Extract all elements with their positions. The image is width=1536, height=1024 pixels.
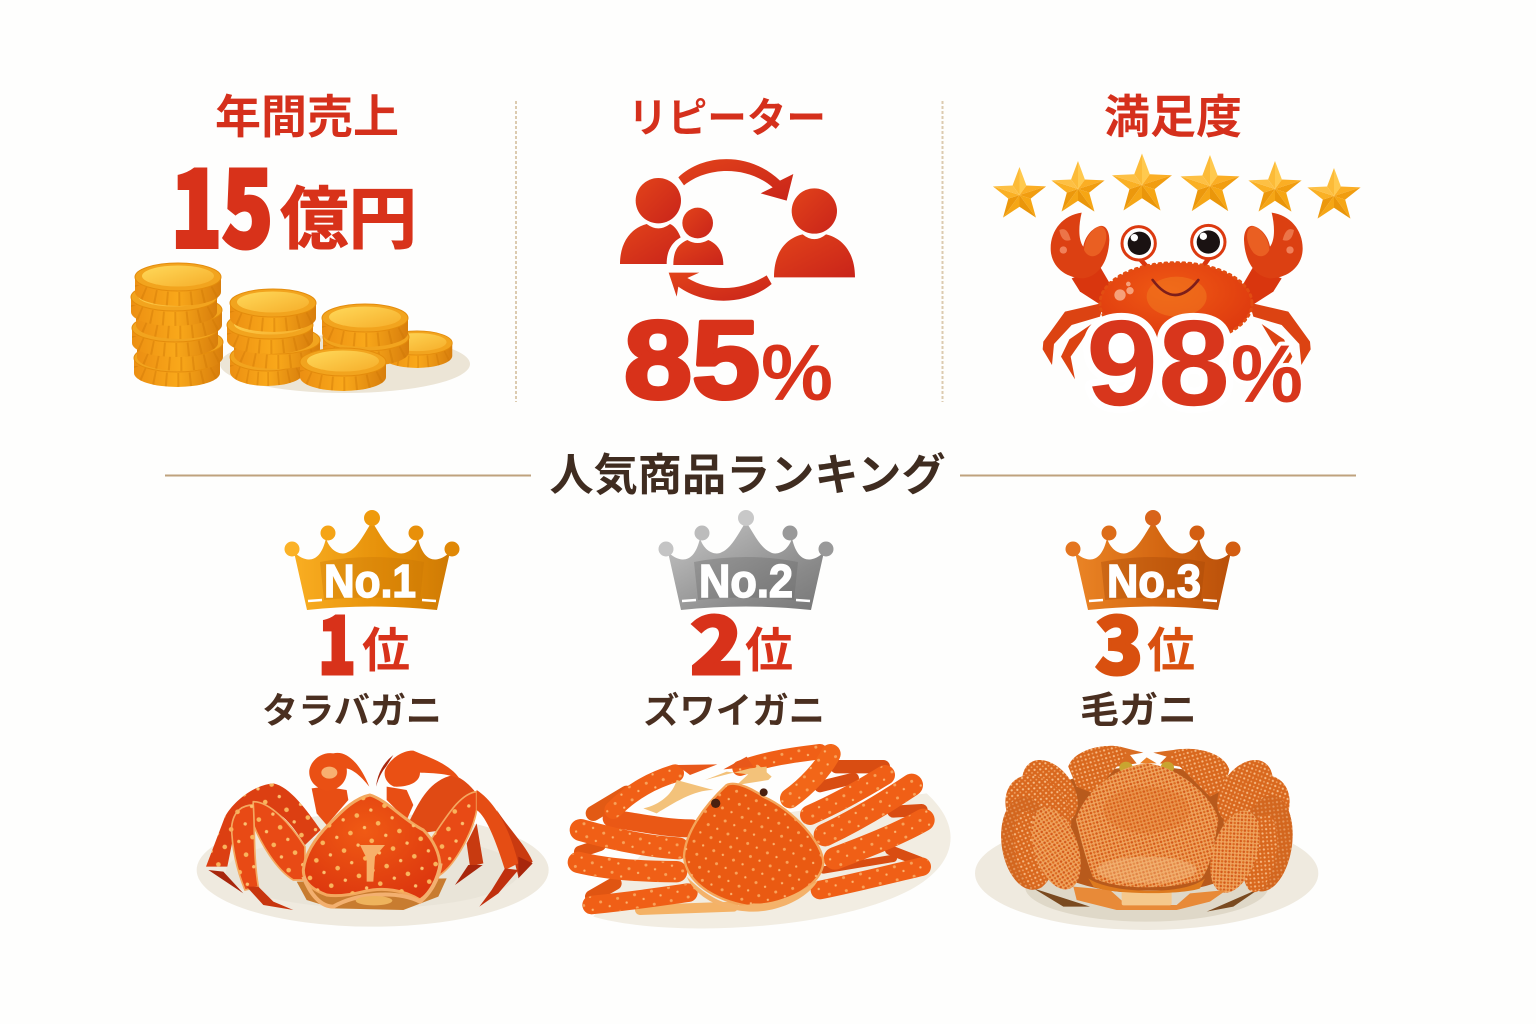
icon: bronze crown No.3: No.3 <box>1107 555 1201 607</box>
rank label: 1st: 1 <box>318 585 356 697</box>
icon: smiling crab mascot <box>1043 213 1311 379</box>
panel: rank 2 <box>578 510 951 928</box>
panel: annual sales <box>131 81 470 393</box>
rank label: 2nd <box>690 585 793 697</box>
icon: silver crown No.2 <box>658 510 834 610</box>
divider right <box>942 101 944 402</box>
section heading: popular product ranking: 人気商品ランキング <box>550 439 946 503</box>
value: 85 percent <box>624 299 833 422</box>
rank label: 1st <box>318 585 410 697</box>
heading: repeaters: リピーター <box>628 84 826 144</box>
icon: gold crown No.1: No.1 <box>324 555 416 607</box>
rank label: 1st: 位 <box>362 611 410 681</box>
icon: silver crown No.2: No.2 <box>699 555 793 607</box>
value: 15 oku yen <box>171 126 417 277</box>
value: 98 percent: 98 <box>1086 295 1230 431</box>
name: king crab: タラバガニ <box>262 682 442 734</box>
value: 15 oku yen: 億円 <box>280 164 417 263</box>
icon: gold crown No.1 <box>284 510 460 610</box>
panel: rank 3 <box>975 510 1318 930</box>
panel: rank 1 <box>197 510 549 927</box>
icon: coin stacks <box>131 263 470 393</box>
icon: bronze crown No.3 <box>1066 510 1240 610</box>
value: 98 percent: % <box>1231 329 1303 420</box>
divider left <box>515 101 517 402</box>
icon: six stars <box>993 154 1361 219</box>
rank label: 2nd: 2 <box>690 585 743 697</box>
icon: customers and cycle arrows <box>620 159 855 301</box>
value: 85 percent: % <box>761 328 833 417</box>
illustration: snow crab on plate <box>578 752 951 928</box>
value: 15 oku yen: 15 <box>171 126 273 277</box>
panel: repeat customers <box>620 84 855 422</box>
heading: annual sales: 年間売上 <box>215 81 399 147</box>
panel: satisfaction <box>993 81 1361 431</box>
illustration: hair crab on plate <box>975 746 1318 930</box>
name: snow crab: ズワイガニ <box>643 682 825 734</box>
rank label: 3rd <box>1095 585 1195 697</box>
name: hair crab: 毛ガニ <box>1080 680 1197 734</box>
value: 85 percent: 85 <box>624 299 760 422</box>
rank label: 2nd: 位 <box>745 611 793 681</box>
rank label: 3rd: 位 <box>1147 611 1195 681</box>
heading: satisfaction: 満足度 <box>1104 81 1242 147</box>
rank label: 3rd: 3 <box>1095 585 1143 697</box>
value: 98 percent <box>1086 295 1303 431</box>
illustration: king crab on plate <box>197 751 549 927</box>
